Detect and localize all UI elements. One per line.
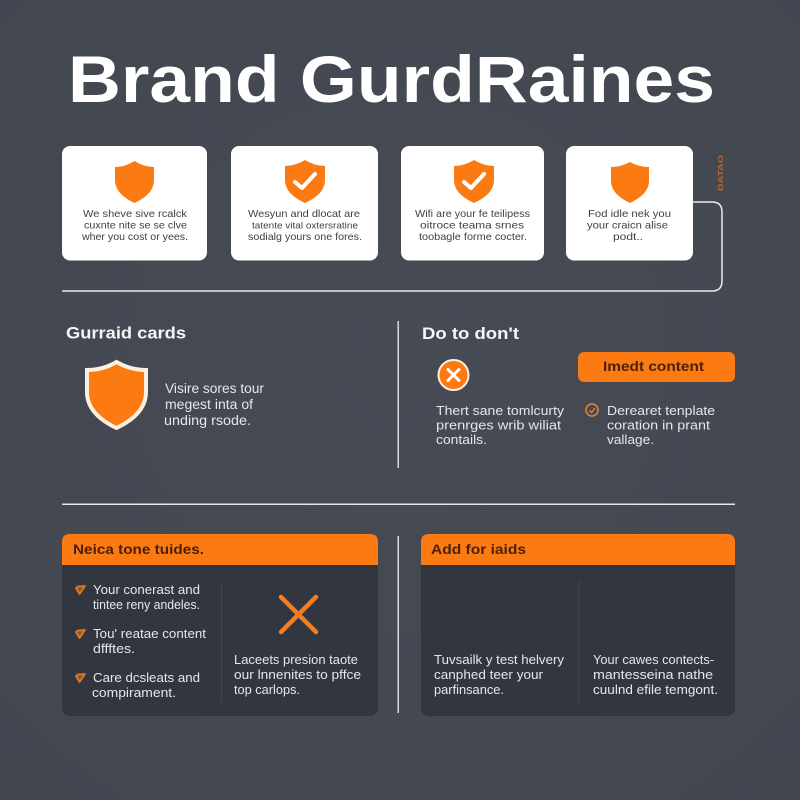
panel text right xyxy=(593,653,718,697)
panel header: tone guides xyxy=(62,534,378,565)
do text: coration in prant xyxy=(607,418,711,432)
checklist text: compirament. xyxy=(92,686,176,700)
do-not text: contails. xyxy=(436,433,487,447)
do-not text xyxy=(436,404,565,447)
card 4 xyxy=(566,146,693,260)
do text xyxy=(607,404,715,447)
button: content xyxy=(578,352,735,382)
card 4 text: podt.. xyxy=(613,231,643,243)
do-not text: Thert sane tomlcurty xyxy=(436,404,565,418)
card 1 xyxy=(62,146,207,260)
guardrail text: unding rsode. xyxy=(164,413,251,428)
heading: do to don't: Do to don't xyxy=(422,325,520,343)
card 2 text xyxy=(248,208,362,243)
icon: x circle xyxy=(438,360,468,390)
card 1 text: wher you cost or yees. xyxy=(81,231,188,243)
panel text left xyxy=(434,653,565,697)
card 2 text: tatente vital oxtersratine xyxy=(252,220,358,232)
card 1 text: cuxnte nite se se clve xyxy=(84,220,187,232)
card 2 text: Wesyun and dlocat are xyxy=(248,208,360,220)
icon: shield 4 xyxy=(611,162,649,203)
panel: add for aids xyxy=(421,534,735,716)
card 3 text: oitroce teama srnes xyxy=(420,220,524,232)
panel text left: canphed teer your xyxy=(434,668,543,682)
guardrail text: megest inta of xyxy=(165,397,253,412)
panel note: Laceets presion taote xyxy=(234,653,358,667)
guardrail text xyxy=(164,381,265,428)
panel header: add for aids: Add for iaids xyxy=(431,541,526,557)
card 2 xyxy=(231,146,378,260)
horizontal divider xyxy=(62,504,735,505)
card 4 text xyxy=(587,208,671,243)
card 3 text: toobagle forme cocter. xyxy=(419,231,527,243)
card 1 text: We sheve sive rcalck xyxy=(83,208,188,220)
vertical divider xyxy=(398,321,399,468)
panel text right: mantesseina nathe xyxy=(593,668,713,682)
connector line xyxy=(62,202,722,291)
checklist text: tintee reny andeles. xyxy=(93,598,200,612)
title: Brand GurdRaines xyxy=(68,42,715,116)
icon: shield 1 xyxy=(115,161,154,203)
do text: Derearet tenplate xyxy=(607,404,715,418)
button: content: Imedt content xyxy=(603,359,705,374)
icon: shield check 2 xyxy=(285,160,325,203)
card 1 text xyxy=(81,208,188,243)
icon: check circle xyxy=(586,404,598,416)
panel text left: parfinsance. xyxy=(434,683,504,697)
checklist text: Care dcsleats and xyxy=(93,671,200,685)
guardrail text: Visire sores tour xyxy=(165,381,265,396)
heading: guardrail cards: Gurraid cards xyxy=(66,324,186,342)
card 3 text: Wifi are your fe teilipess xyxy=(415,208,530,220)
panel note: our lnnenites to pffce xyxy=(234,668,361,682)
do text: vallage. xyxy=(607,433,654,447)
checklist text: Tou' reatae content xyxy=(93,627,207,641)
panel note: top carlops. xyxy=(234,683,300,697)
checklist text: Your conerast and xyxy=(93,583,200,597)
card 4 text: your craicn alise xyxy=(587,220,668,232)
checklist text: dffftes. xyxy=(93,642,135,656)
card 2 text: sodialg yours one fores. xyxy=(248,231,362,243)
panel text right: cuulnd efile temgont. xyxy=(593,683,718,697)
do-not text: prenrges wrib wiliat xyxy=(436,418,562,432)
panel: tone guides xyxy=(62,534,378,716)
check icons xyxy=(76,586,85,682)
panel text left: Tuvsailk y test helvery xyxy=(434,653,565,667)
checklist text xyxy=(92,583,207,700)
small vertical label: DATAO xyxy=(716,155,725,191)
icon: shield check 3 xyxy=(454,160,494,203)
panel note xyxy=(234,653,361,697)
card 4 text: Fod idle nek you xyxy=(588,208,671,220)
icon: large x xyxy=(281,597,316,632)
card 3 text xyxy=(415,208,530,243)
vertical divider lower xyxy=(398,536,399,713)
icon: large shield xyxy=(87,362,146,428)
panel text right: Your cawes contects- xyxy=(593,653,714,667)
panel header: add for aids xyxy=(421,534,735,565)
panel header: tone guides: Neica tone tuides. xyxy=(73,541,204,557)
card 3 xyxy=(401,146,544,260)
